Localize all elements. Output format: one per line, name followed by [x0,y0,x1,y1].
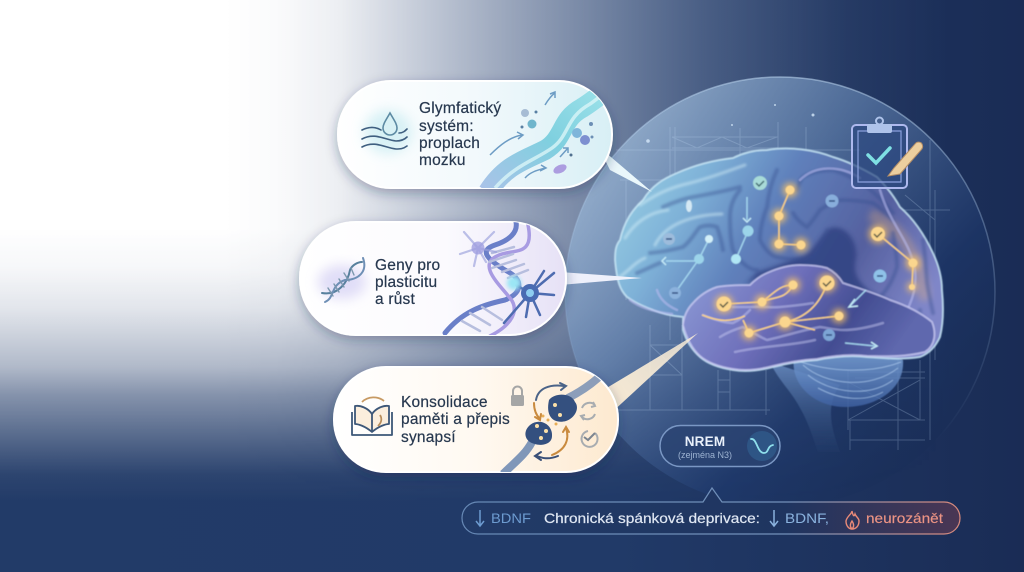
icon: check [582,431,598,447]
dark sulci [637,170,933,340]
label: especially N3: (zejména N3) [678,450,732,460]
heading: glymphatic: systém: [419,118,474,135]
icon: slow wave [747,431,777,461]
blue nodes [662,176,886,349]
icon: DNA helix [318,258,366,302]
dark folds between lobes [745,227,925,322]
icon: clipboard and pencil [852,118,923,188]
glow beneath gold nodes [715,183,920,340]
cerebellum [794,352,903,407]
icon: refresh [581,402,595,420]
panel: memory consolidation [334,367,618,474]
label: BDNF down second [770,510,829,526]
check marks on nodes [720,232,882,307]
illustration: flowing stream [488,86,612,192]
heading: glymphatic: Glymfatický [419,100,501,117]
glass sphere behind brain [565,77,995,507]
temporal lobe [683,265,934,370]
pointer: callout 3 to brain [600,333,698,414]
brainstem [770,362,840,452]
sparkle dots [646,104,814,143]
brain illustration [615,148,943,452]
NREM badge [660,426,780,466]
heading: genes: Geny pro [375,257,440,274]
label: BDNF down [476,510,531,526]
pointer: callout 1 to brain [598,146,652,192]
label: BDNF down: BDNF [491,511,531,526]
icon: padlock [511,387,524,406]
icon: flame [846,511,859,529]
icon: water drop and waves [362,110,412,154]
panel: glymphatic system [338,81,612,192]
blue pathways [666,197,875,346]
light gyri highlights [618,165,915,330]
label: chronic sleep deprivation: Chronická spánková deprivace: [544,510,760,526]
pointer: callout 2 to brain [560,272,642,285]
heading: consolidation: synapsí [401,429,456,446]
illustration: synapse with arrows [503,378,598,474]
panel: genes for plasticity [300,222,566,336]
label: BDNF down second: BDNF, [785,511,829,526]
label: NREM: NREM [685,434,725,449]
heading: consolidation: Konsolidace [401,394,488,411]
heading: consolidation: paměti a přepis [401,411,510,428]
heading: glymphatic: proplach [419,135,480,152]
illustration: large DNA helix and neurons [445,222,554,336]
gold nodes [716,186,918,338]
heading: genes: a růst [375,291,415,308]
scaffolding lines [600,122,950,450]
cerebrum silhouette [615,148,943,371]
heading: glymphatic: mozku [419,152,466,169]
icon: open book [352,397,392,435]
status bar: chronic sleep deprivation [462,488,960,534]
warm glow in frontal lobe [870,215,925,300]
gold pathways [702,190,913,333]
label: neuroinflammation: neurozánět [866,510,943,526]
heading: genes: plasticitu [375,274,437,291]
